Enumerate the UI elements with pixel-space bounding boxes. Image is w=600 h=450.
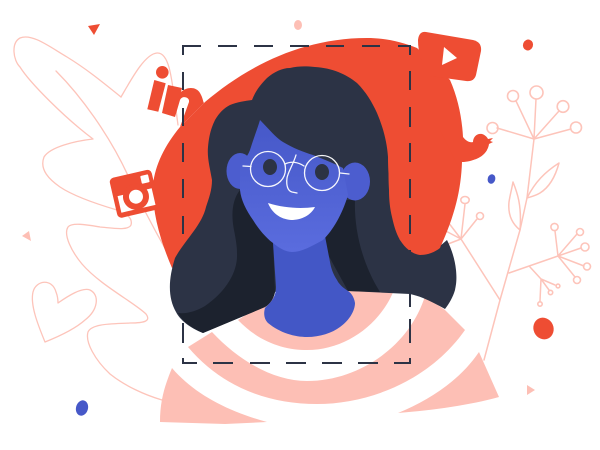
red triangle top xyxy=(88,24,100,35)
plant upper branch xyxy=(497,99,571,139)
plant buds xyxy=(461,86,590,306)
shirt xyxy=(160,280,499,424)
hair right shadow xyxy=(320,200,380,292)
face shape xyxy=(240,120,348,252)
right ear xyxy=(340,162,370,200)
plant leaves xyxy=(509,163,559,230)
eye right xyxy=(315,164,329,180)
mouth xyxy=(268,203,315,220)
icon: linkedin xyxy=(147,66,204,127)
plant right branch xyxy=(509,231,584,301)
dashed frame xyxy=(183,46,410,363)
nose line xyxy=(287,155,297,193)
red dot lower right xyxy=(530,314,557,343)
icon: instagram xyxy=(109,169,160,219)
shirt middle band xyxy=(188,296,465,404)
face xyxy=(226,120,370,252)
neck xyxy=(264,236,355,337)
outline heart xyxy=(32,282,96,342)
icon: youtube xyxy=(418,32,481,81)
shirt left piece xyxy=(160,368,267,424)
hair left shadow xyxy=(178,190,275,333)
blue dot right xyxy=(487,173,496,185)
red blob with social icons xyxy=(109,32,493,268)
red blob background xyxy=(153,38,487,268)
plant stem xyxy=(484,139,534,360)
confetti dots and triangles xyxy=(22,20,557,417)
icon: play triangle xyxy=(442,47,457,65)
glasses xyxy=(243,152,349,193)
red dot top right xyxy=(521,38,535,52)
hair xyxy=(170,66,456,333)
left ear xyxy=(226,153,254,189)
blue dot lower left xyxy=(74,399,90,417)
plant left branch xyxy=(440,204,500,300)
shirt inner band xyxy=(238,280,394,350)
pink dot top xyxy=(294,20,302,30)
shirt right piece xyxy=(398,352,499,413)
plant: right decoration xyxy=(440,86,590,360)
hair main shape xyxy=(170,66,456,333)
icon: twitter bird xyxy=(470,134,493,160)
pink triangle right xyxy=(527,385,535,395)
eye left xyxy=(263,159,277,175)
outline leaf: left decoration xyxy=(14,37,178,400)
red lock over hair xyxy=(388,130,460,255)
pink triangle left xyxy=(22,231,31,241)
